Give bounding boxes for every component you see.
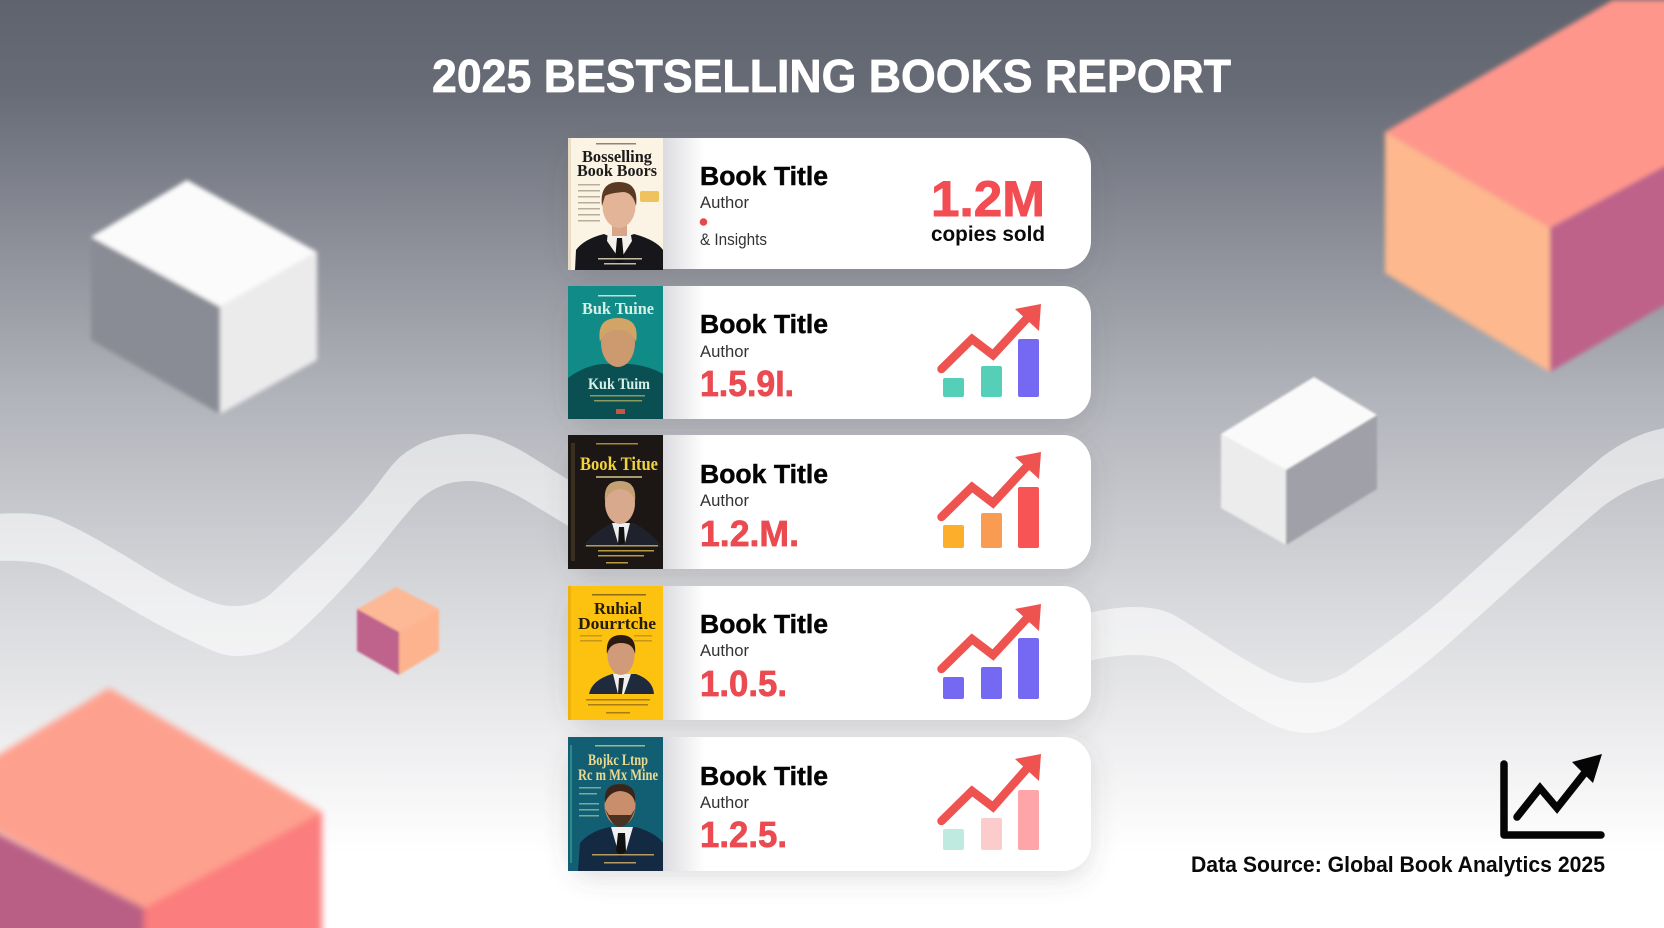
cube: coral top right [1385,0,1664,372]
sales figure: 1.0.5. [700,663,787,704]
growth chart [942,604,1041,699]
panel: book card 5 [568,737,1091,871]
book cover 2: Kuk Tuim [588,376,651,393]
wave ribbon: left [0,434,575,656]
panel: book card 1 [568,138,1091,270]
book cover 4: Ruhial [594,599,642,618]
book title: Book Title [700,611,828,639]
sales figure: 1.2.5. [700,814,787,855]
author: Author [700,491,749,510]
growth chart [942,304,1041,397]
cube: coral bottom left [0,688,322,928]
data source note: Data Source: Global Book Analytics 2025 [1191,852,1605,877]
book cover 2 [568,286,663,419]
book cover 3 [568,435,663,569]
cube: white middle right [1221,377,1377,545]
wave ribbon: right [1085,427,1664,733]
author: Author [700,793,749,812]
book cover 5: Rc m Mx Mine [578,767,658,784]
title: 2025 BESTSELLING BOOKS REPORT [432,50,1231,102]
insights label: & Insights [700,230,767,249]
book title: Book Title [700,163,828,191]
author: Author [700,641,749,660]
book cover 5: Bojkc Ltnp [588,752,648,769]
growth chart [942,452,1041,548]
author: Author [700,193,749,212]
growth chart [942,754,1041,850]
book cover 3: Book Titue [580,454,658,475]
book cover 1 [568,138,663,270]
red dot [700,218,707,226]
book title: Book Title [700,311,828,339]
book cover 5 [568,737,663,871]
book cover 1: Bosselling [582,147,652,166]
sales figure: 1.5.9I. [700,363,794,404]
author: Author [700,342,749,361]
book cover 1: Book Boors [577,161,657,180]
sales figure: 1.2.M. [700,513,799,554]
book cover 2: Buk Tuine [582,299,654,318]
icon: trend chart [1504,754,1602,835]
panel: book card 4 [568,586,1091,720]
book title: Book Title [700,763,828,791]
panel: book card 2 [568,286,1091,419]
cube: white top left [91,180,317,414]
panel: book card 3 [568,435,1091,569]
cube: small orange [357,587,439,675]
sales figure: 1.2M [931,171,1045,227]
book cover 4: Dourrtche [578,614,656,633]
book title: Book Title [700,461,828,489]
sales label: copies sold [931,222,1045,246]
book cover 4 [568,586,663,720]
